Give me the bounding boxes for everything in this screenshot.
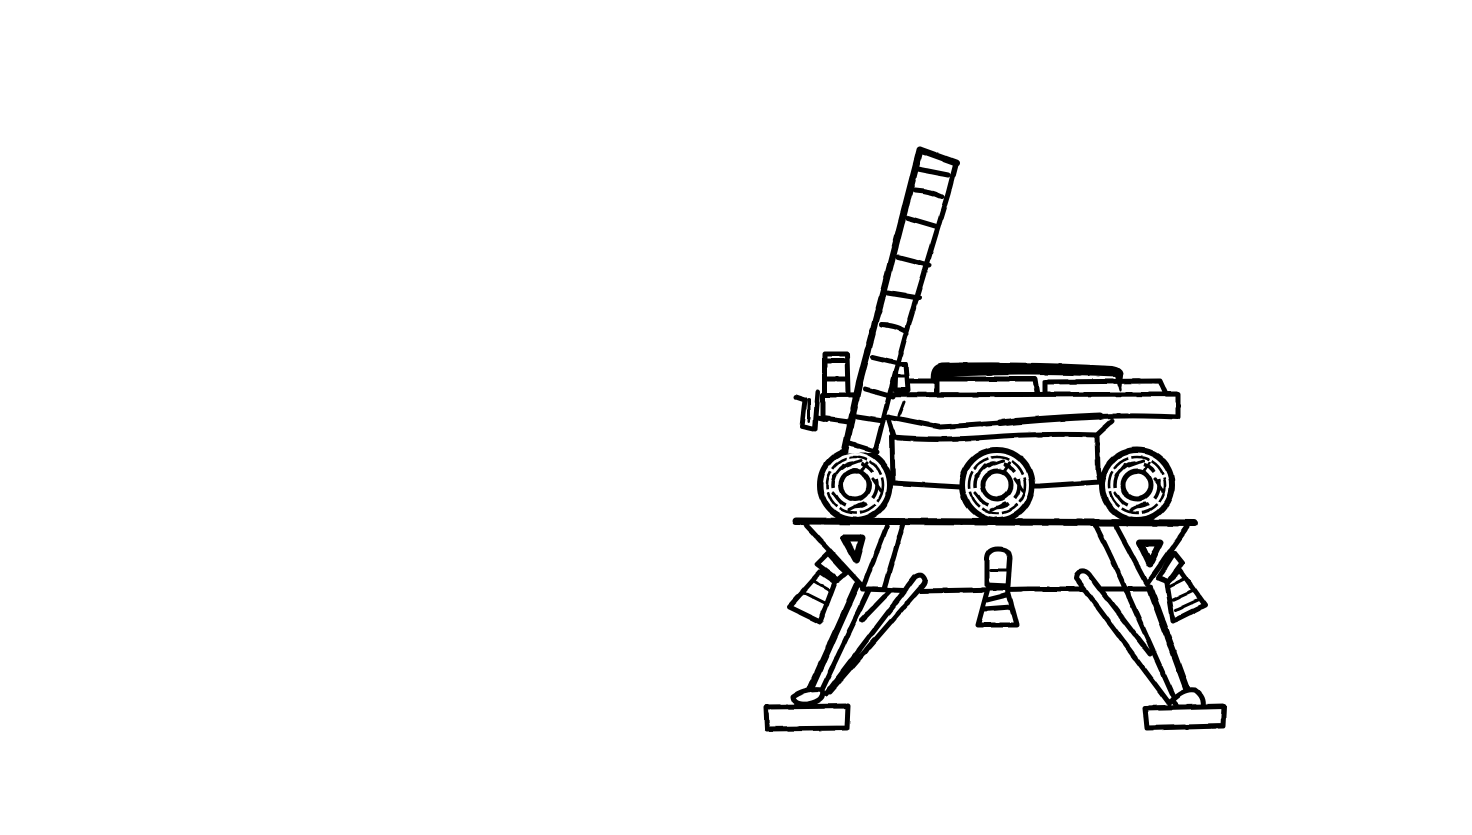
left mast box [825, 354, 848, 393]
center thruster [978, 549, 1017, 625]
left truss triangle [806, 525, 903, 589]
left foot pad [766, 706, 848, 729]
solar panel pack [905, 363, 1165, 392]
wheels [820, 450, 1172, 520]
rover body [889, 420, 1112, 487]
lander body [796, 521, 1194, 591]
left thruster [789, 553, 846, 622]
rover deck [823, 394, 1178, 427]
wheel 3 [1102, 450, 1172, 520]
left landing leg [793, 575, 925, 704]
right landing leg [1076, 571, 1203, 707]
right thruster [1158, 553, 1205, 621]
wheel 2 [962, 450, 1032, 520]
wheel 1 [820, 450, 890, 520]
right truss triangle [1096, 526, 1187, 588]
right foot pad [1145, 706, 1224, 728]
solar arm [845, 150, 957, 453]
sketch group [766, 150, 1224, 729]
right mast box [895, 364, 908, 390]
hook instrument [796, 392, 826, 429]
